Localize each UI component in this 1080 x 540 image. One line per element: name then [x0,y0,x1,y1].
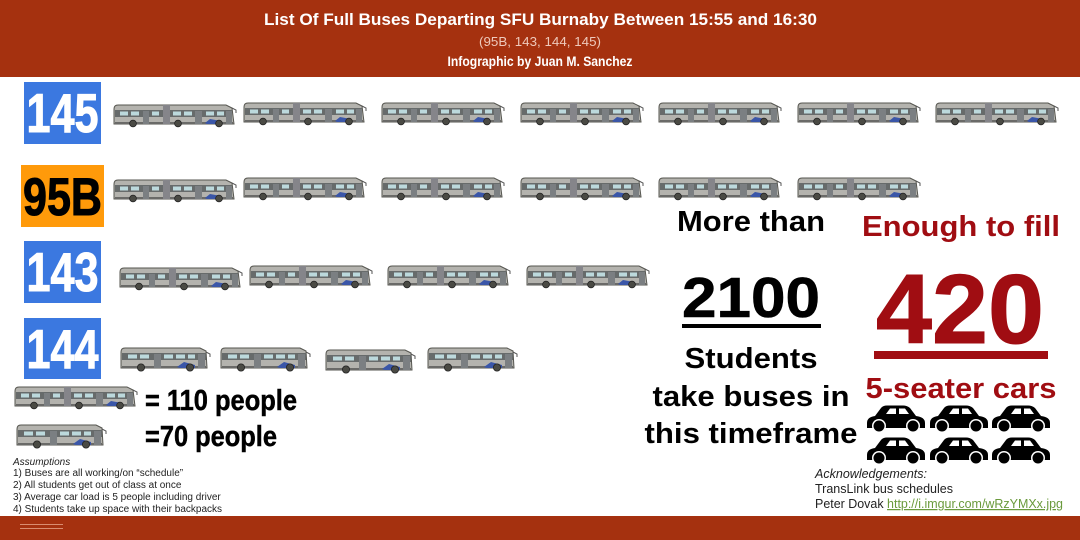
stat: cars: 5-seater cars [866,373,1056,405]
route badge 144: 144 [26,318,99,380]
assumptions text block: 3) Average car load is 5 people including driver [13,492,221,503]
number 2100: 2100 [682,266,820,330]
stat: students: More than [677,206,825,238]
assumptions text block: 4) Students take up space with their backpacks [13,504,222,515]
assumptions text block [12,457,222,515]
assumptions text block: 2) All students get out of class at once [13,480,182,491]
legend: standard bus [17,421,277,453]
route badge 145: 145 [26,82,98,144]
stat: cars [862,211,1060,405]
bus row: route 95B [114,178,920,202]
assumptions text block: 1) Buses are all working/on “schedule” [13,468,183,479]
stat: students: Students [684,343,818,375]
route badge 143: 143 [26,241,98,303]
author credit: Infographic by Juan M. Sanchez [448,53,632,69]
subtitle: route list: (95B, 143, 144, 145) [479,35,601,49]
acknowledgements text block: Acknowledgements: [814,467,927,481]
footer band [0,516,1080,540]
assumptions text block: Assumptions [12,457,70,468]
header banner [0,0,1080,77]
title: List Of Full Buses Departing SFU Burnaby Between 15:55 and 16:30 [264,10,817,29]
acknowledgements text block: Peter Dovak http://i.imgur.com/wRzYMXx.jpg [815,497,1063,511]
bus row: route 144 [121,348,517,373]
acknowledgements text block: TransLink bus schedules [815,482,953,496]
acknowledgements text block [814,467,1063,511]
stat: cars: Enough to fill [862,211,1060,243]
route badge 95B: 95B [23,168,102,227]
stat: students: this timeframe [644,418,858,450]
stat: students: take buses in [652,381,850,413]
number 420: 420 [876,254,1044,364]
legend: articulated bus [15,385,297,417]
legend: standard bus: =70 people [145,421,277,453]
legend: articulated bus: = 110 people [145,385,297,417]
bus row: route 145 [114,103,1058,127]
car icons [867,406,1050,465]
bus row: route 143 [120,266,649,290]
stat: students [644,206,858,450]
